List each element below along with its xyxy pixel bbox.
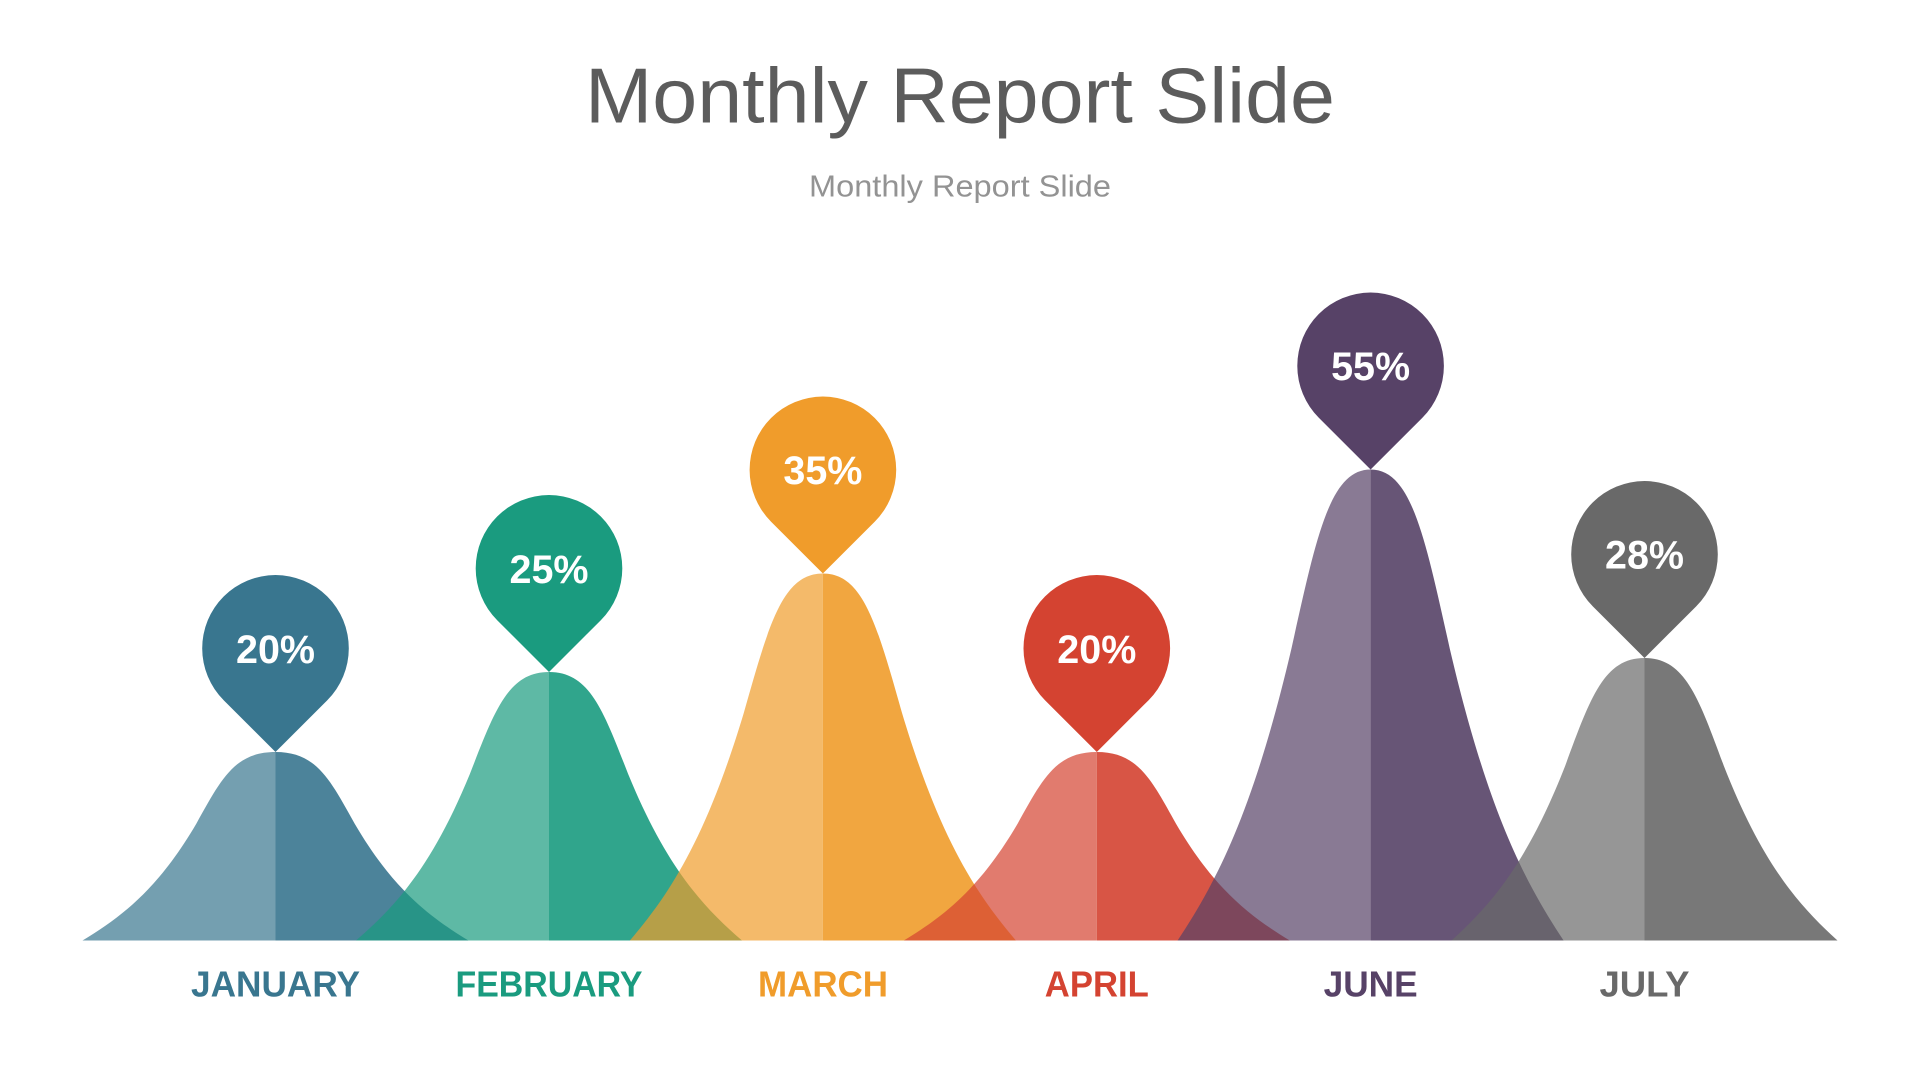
label: April: APRIL (1045, 964, 1149, 1005)
pin: February 25%: 25% (510, 548, 588, 592)
pin: February 25% (476, 495, 622, 672)
pin: July 28% (1571, 481, 1718, 658)
panel: February (356, 495, 742, 1005)
pin: March 35%: 35% (783, 449, 862, 493)
label: February: FEBRUARY (456, 964, 642, 1005)
pin: January 20% (202, 575, 349, 752)
subtitle: Monthly Report Slide (809, 168, 1111, 204)
pin: June 55%: 55% (1331, 345, 1410, 389)
bell: June (1178, 470, 1564, 940)
label: June: JUNE (1324, 964, 1418, 1005)
pin: April 20%: 20% (1057, 628, 1136, 672)
bell: January (82, 752, 468, 940)
pin: January 20%: 20% (236, 628, 315, 672)
label: January: JANUARY (191, 964, 360, 1005)
panel: June (1178, 293, 1564, 1005)
bell: July (1452, 658, 1838, 940)
panel: July (1452, 481, 1838, 1005)
panel: January (82, 575, 468, 1005)
pin: March 35% (750, 397, 896, 574)
pin: July 28%: 28% (1605, 534, 1684, 578)
bell: February (356, 672, 742, 940)
pin: April 20% (1024, 575, 1170, 752)
bell: April (904, 752, 1290, 940)
panel: March (630, 397, 1016, 1005)
pin: June 55% (1297, 293, 1444, 470)
title: Monthly Report Slide (585, 52, 1335, 140)
bell: March (630, 574, 1016, 940)
panel: April (904, 575, 1290, 1005)
label: March: MARCH (758, 964, 888, 1005)
label: July: JULY (1600, 964, 1690, 1005)
